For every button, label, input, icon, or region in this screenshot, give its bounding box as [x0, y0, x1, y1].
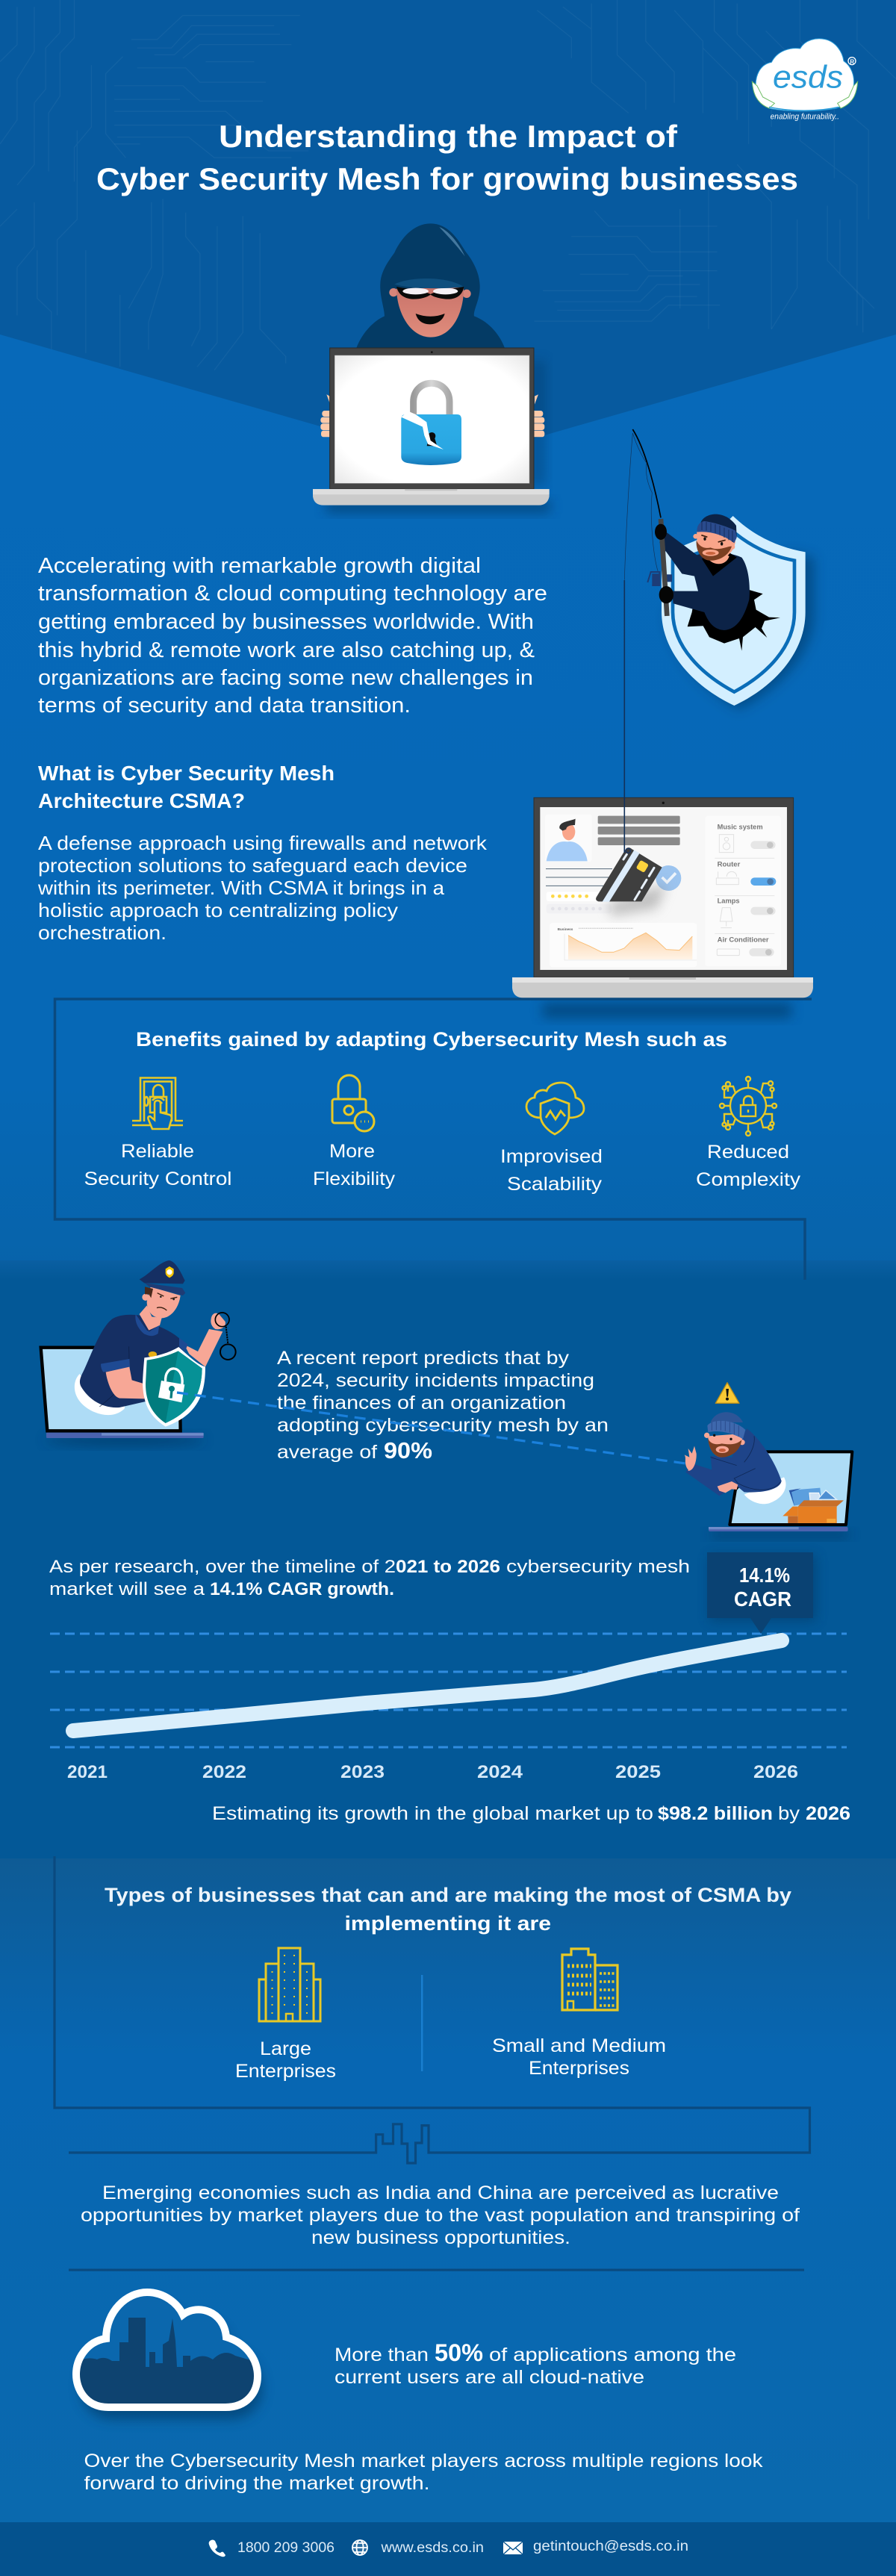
research text: 021 to 2026: [396, 1557, 500, 1577]
market estimate text: [212, 1803, 850, 1824]
icon: padlock with chat bubble: [332, 1075, 374, 1131]
illustration: policeman from laptop with shield: [41, 1260, 236, 1446]
intro paragraph: [38, 554, 547, 718]
illustration: thief fishing from broken shield: [624, 429, 814, 709]
heading: types of businesses: [105, 1884, 791, 1935]
illustration: laptop dashboard with hooked credit card: Lamps: [718, 897, 740, 905]
column: small and medium enterprises: [492, 1949, 666, 2079]
illustration: laptop dashboard with hooked credit card: Music system: [718, 824, 763, 831]
illustration: laptop dashboard with hooked credit card: Router: [718, 861, 741, 868]
research text: market will see a: [49, 1579, 205, 1599]
logo: esds cloud: [752, 39, 858, 121]
heading: what is CSMA: What is Cyber Security Mesh: [38, 762, 335, 785]
market estimate text: by: [778, 1803, 800, 1824]
column: small and medium enterprises: Small and Medium: [492, 2035, 666, 2056]
CSMA definition text: A defense approach using firewalls and network: [38, 832, 488, 854]
callout: 14.1% CAGR: 14.1%: [739, 1564, 790, 1587]
text: phone number: 1800 209 3006: [237, 2540, 335, 2556]
market estimate text: Estimating its growth in the global market up to: [212, 1803, 653, 1824]
footer bar: [0, 2522, 896, 2576]
report text: the finances of an organization: [277, 1393, 566, 1413]
line chart: CAGR growth: [50, 1552, 847, 1782]
callout: 14.1% CAGR: [707, 1552, 816, 1634]
divider: [421, 1975, 423, 2071]
intro paragraph: organizations are facing some new challenges in: [38, 666, 533, 690]
text: 50% cloud-native: 50%: [435, 2339, 483, 2366]
year axis labels: 2025: [615, 1762, 661, 1782]
benefit: improvised scalability: Scalability: [507, 1174, 603, 1195]
research text: [49, 1557, 690, 1599]
intro paragraph: terms of security and data transition.: [38, 694, 411, 718]
year axis labels: 2021: [67, 1762, 108, 1782]
heading: types of businesses: implementing it are: [345, 1912, 551, 1935]
text: emerging economies: new business opportunities.: [311, 2227, 570, 2248]
illustration: laptop dashboard with hooked credit card: Air Conditioner: [718, 936, 769, 944]
icon: mail: [503, 2542, 523, 2554]
heading: types of businesses: Types of businesses that can and are making the most of CSMA by: [105, 1884, 791, 1906]
benefit: reduced complexity: Complexity: [696, 1169, 801, 1190]
CSMA definition text: orchestration.: [38, 921, 167, 944]
icon: small buildings: [562, 1949, 617, 2010]
benefit: more flexibility: Flexibility: [313, 1169, 396, 1189]
benefit: more flexibility: More: [329, 1141, 375, 1162]
research text: cybersecurity mesh: [506, 1557, 690, 1577]
fishing line down to the card: [623, 580, 625, 853]
intro paragraph: this hybrid & remote work are also catching up, &: [38, 638, 535, 662]
illustration: thief escaping from laptop: [685, 1383, 852, 1538]
report text: A recent report predicts that by: [277, 1348, 570, 1369]
research text: 14.1% CAGR growth.: [210, 1579, 394, 1599]
market estimate text: $98.2 billion: [658, 1803, 773, 1824]
CSMA definition text: [37, 832, 488, 944]
benefit: reliable security control: [84, 1078, 231, 1189]
column: small and medium enterprises: Enterprises: [529, 2058, 629, 2079]
research text: As per research, over the timeline of 2: [49, 1557, 396, 1577]
text: 50% cloud-native: of applications among the: [489, 2345, 736, 2365]
benefit: reliable security control: Security Control: [84, 1169, 231, 1189]
intro paragraph: Accelerating with remarkable growth digital: [38, 554, 481, 578]
dashed connector between police and thief: [177, 1393, 685, 1463]
logo: esds cloud: enabling futurability..: [771, 112, 839, 121]
benefit: reliable security control: Reliable: [121, 1141, 194, 1162]
panel: benefits: [55, 999, 812, 1280]
CSMA definition text: protection solutions to safeguard each device: [38, 854, 467, 877]
text: 50% cloud-native: [335, 2339, 736, 2388]
report text: adopting cybersecurity mesh by an: [277, 1415, 609, 1436]
market estimate text: 2026: [806, 1803, 850, 1824]
benefit: reduced complexity: [696, 1077, 801, 1190]
text: email: getintouch@esds.co.in: [533, 2539, 688, 2554]
heading: what is CSMA: Architecture CSMA?: [38, 789, 245, 812]
benefit: improvised scalability: [500, 1083, 603, 1195]
icon: circuit lock: [720, 1077, 777, 1136]
text: 50% cloud-native: current users are all cloud-native: [335, 2367, 644, 2388]
icon: cloud with city skyline: [75, 2292, 262, 2419]
text: closing statement: [84, 2451, 763, 2494]
text: closing statement: Over the Cybersecurity Mesh market players across multiple regions look: [84, 2451, 763, 2471]
benefit: more flexibility: [313, 1075, 396, 1189]
year axis labels: 2022: [202, 1762, 246, 1782]
CSMA definition text: holistic approach to centralizing policy: [38, 899, 398, 921]
illustration: laptop dashboard with hooked credit card: [512, 797, 813, 1018]
logo: esds cloud: esds: [773, 60, 843, 96]
growth curve: [73, 1640, 782, 1731]
column: large enterprises: Enterprises: [235, 2061, 336, 2082]
icon: tall buildings: [259, 1948, 320, 2021]
text: emerging economies: [81, 2183, 800, 2248]
illustration: laptop dashboard with hooked credit card: Business: [558, 927, 573, 931]
report text: 2024, security incidents impacting: [277, 1370, 594, 1391]
title: Cyber Security Mesh for growing businesses: [96, 161, 798, 196]
icon: door lock with finger: [132, 1078, 183, 1129]
column: large enterprises: [235, 1948, 336, 2082]
intro paragraph: getting embraced by businesses worldwide. With: [38, 610, 534, 634]
icon: cloud shield: [526, 1083, 584, 1134]
title: Understanding the Impact of: [219, 119, 678, 154]
illustration: hacker holding laptop with broken lock: [313, 223, 550, 513]
CSMA definition text: within its perimeter. With CSMA it brings in a: [37, 877, 445, 899]
icon: globe: [352, 2540, 367, 2555]
text: 50% cloud-native: More than: [335, 2345, 429, 2365]
year axis labels: 2024: [477, 1762, 523, 1782]
year axis labels: 2026: [753, 1762, 798, 1782]
text: website: www.esds.co.in: [380, 2540, 484, 2556]
benefit: reduced complexity: Reduced: [707, 1142, 789, 1163]
benefit: improvised scalability: Improvised: [500, 1146, 603, 1167]
text: closing statement: forward to driving the market growth.: [84, 2473, 430, 2494]
year axis labels: [67, 1762, 798, 1782]
title: [96, 119, 798, 196]
logo: esds cloud: R: [850, 58, 854, 65]
report text: [277, 1348, 609, 1463]
heading: benefits: Benefits gained by adapting Cybersecurity Mesh such as: [136, 1028, 727, 1051]
text: emerging economies: Emerging economies such as India and China are perceived as lucrative: [102, 2183, 779, 2203]
column: large enterprises: Large: [260, 2038, 311, 2059]
report text: 90%: [384, 1437, 432, 1463]
intro paragraph: transformation & cloud computing technology are: [38, 582, 547, 606]
icon: phone: [209, 2540, 225, 2557]
text: emerging economies: opportunities by market players due to the vast population and transpiring of: [81, 2205, 800, 2226]
callout: 14.1% CAGR: CAGR: [734, 1587, 791, 1611]
year axis labels: 2023: [340, 1762, 385, 1782]
report text: average of: [277, 1442, 377, 1463]
heading: what is CSMA: [38, 762, 335, 812]
panel: types of businesses: [55, 1856, 809, 2163]
